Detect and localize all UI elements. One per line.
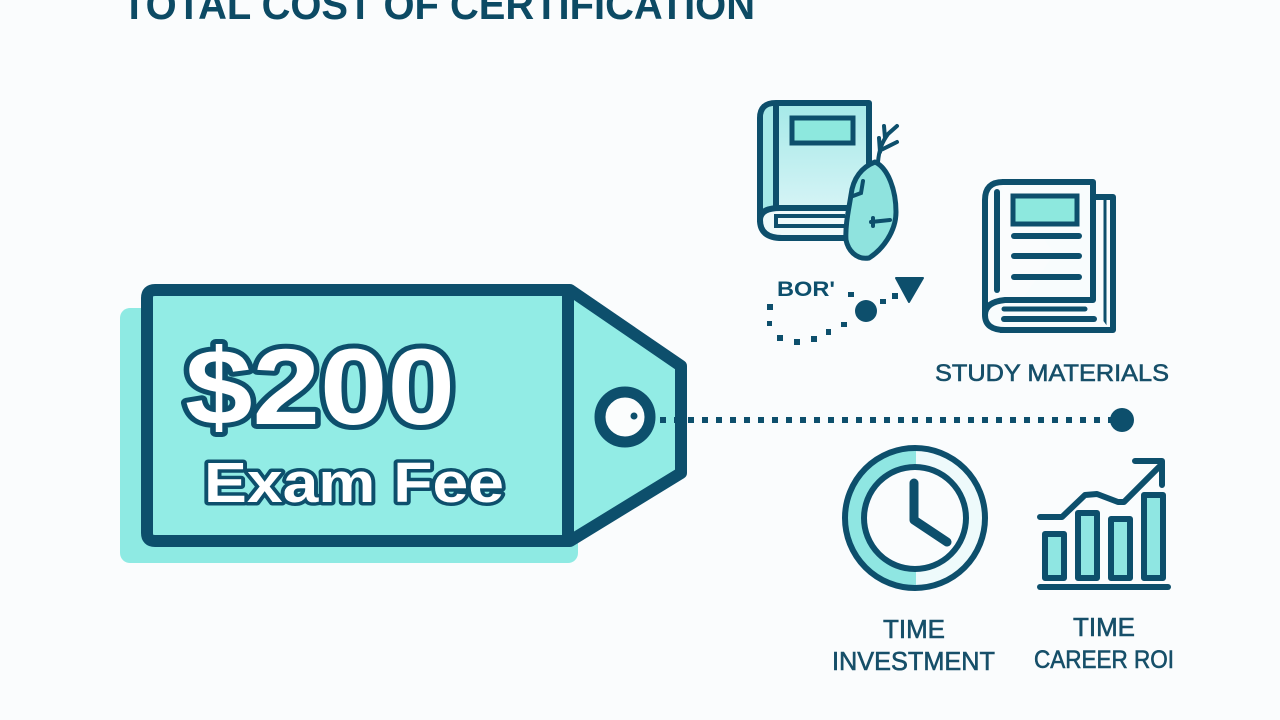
icon: study materials book xyxy=(985,182,1113,330)
label: time investment: INVESTMENT xyxy=(832,646,995,676)
tag body xyxy=(147,290,681,541)
icon: clock xyxy=(845,448,985,588)
dotted path with label xyxy=(767,278,923,345)
panel: price tag xyxy=(120,290,681,563)
label: study materials: STUDY MATERIALS xyxy=(935,360,1169,387)
tag label: Exam Fee xyxy=(204,451,504,515)
label: career roi: TIME xyxy=(1073,612,1135,642)
tag hole xyxy=(600,392,650,442)
label: career roi: CAREER ROI xyxy=(1034,646,1174,674)
icon: career chart xyxy=(1040,461,1168,587)
icon: book with leaf xyxy=(760,103,897,258)
dotted connector xyxy=(660,408,1134,432)
tag divider xyxy=(562,290,574,541)
label: time investment: TIME xyxy=(883,614,945,644)
price: $200 xyxy=(185,326,455,447)
label: time investment xyxy=(832,614,995,676)
tag back shadow xyxy=(120,308,578,563)
path label: BOR' xyxy=(777,278,835,301)
leaf xyxy=(846,126,897,258)
label: career roi xyxy=(1034,612,1174,674)
